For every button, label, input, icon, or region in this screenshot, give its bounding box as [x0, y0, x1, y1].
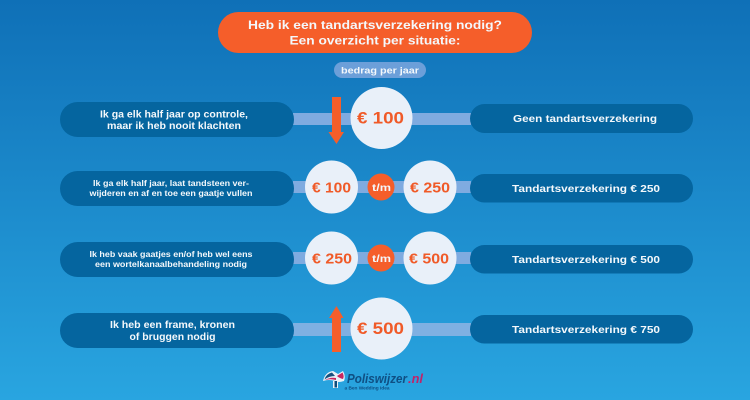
title: Een overzicht per situatie:	[290, 34, 460, 48]
situation pill: wijderen en af en toe een gaatje vullen	[88, 188, 252, 198]
amount circle: € 500	[357, 319, 404, 338]
situation pill	[60, 171, 294, 206]
row 1	[60, 87, 693, 149]
row 2	[60, 160, 693, 214]
situation pill: Ik heb vaak gaatjes en/of heb wel eens	[90, 249, 253, 259]
label: bedrag per jaar: bedrag per jaar	[341, 66, 420, 76]
connector bar	[293, 252, 471, 264]
situation pill: maar ik heb nooit klachten	[107, 121, 241, 132]
amount circle: to	[404, 160, 456, 214]
amount circle	[350, 87, 412, 149]
advice pill: Tandartsverzekering € 750	[512, 324, 660, 336]
badge: t/m: t/m	[372, 182, 391, 194]
title: Heb ik een tandartsverzekering nodig?	[248, 18, 502, 32]
connector bar	[293, 181, 471, 193]
title	[218, 12, 532, 53]
situation pill: Ik ga elk half jaar op controle,	[100, 110, 248, 120]
tagline: a Ben Wedding idea	[344, 386, 390, 390]
situation pill	[60, 313, 294, 348]
amount circle: € 100	[357, 108, 404, 128]
advice pill	[470, 104, 693, 133]
amount circle: to	[404, 232, 456, 284]
advice pill	[470, 315, 693, 344]
amount circle: to: € 500	[409, 250, 449, 268]
advice pill: Tandartsverzekering € 250	[512, 183, 660, 195]
advice pill: Geen tandartsverzekering	[513, 113, 657, 125]
amount circle	[350, 298, 412, 360]
badge: t/m: t/m	[372, 253, 391, 265]
situation pill: Ik ga elk half jaar, laat tandsteen ver-	[93, 178, 249, 188]
situation pill	[60, 242, 294, 277]
badge: t/m	[368, 244, 394, 272]
row 4	[60, 298, 693, 360]
icon: umbrella mark	[323, 371, 345, 388]
arrow: down	[328, 97, 344, 144]
row 3	[60, 232, 693, 284]
label: bedrag per jaar	[334, 62, 426, 78]
amount circle: from: € 100	[312, 180, 351, 196]
situation pill: een wortelkanaalbehandeling nodig	[95, 259, 247, 269]
amount circle: to: € 250	[410, 180, 450, 196]
logo: Poliswijzer.nl: .nl	[408, 371, 423, 386]
wordmark: Poliswijzer	[347, 371, 408, 386]
advice pill: Tandartsverzekering € 500	[512, 254, 660, 266]
connector bar	[293, 113, 471, 125]
situation pill	[60, 102, 294, 137]
badge: t/m	[368, 174, 394, 200]
connector bar	[293, 323, 471, 336]
logo: Poliswijzer.nl	[323, 371, 423, 390]
amount circle: from: € 250	[312, 250, 352, 268]
situation pill: Ik heb een frame, kronen	[110, 320, 235, 331]
amount circle: from	[305, 232, 358, 284]
amount circle: from	[305, 160, 358, 214]
arrow: up	[329, 306, 344, 352]
advice pill	[470, 174, 693, 202]
advice pill	[470, 245, 693, 274]
situation pill: of bruggen nodig	[130, 332, 216, 343]
